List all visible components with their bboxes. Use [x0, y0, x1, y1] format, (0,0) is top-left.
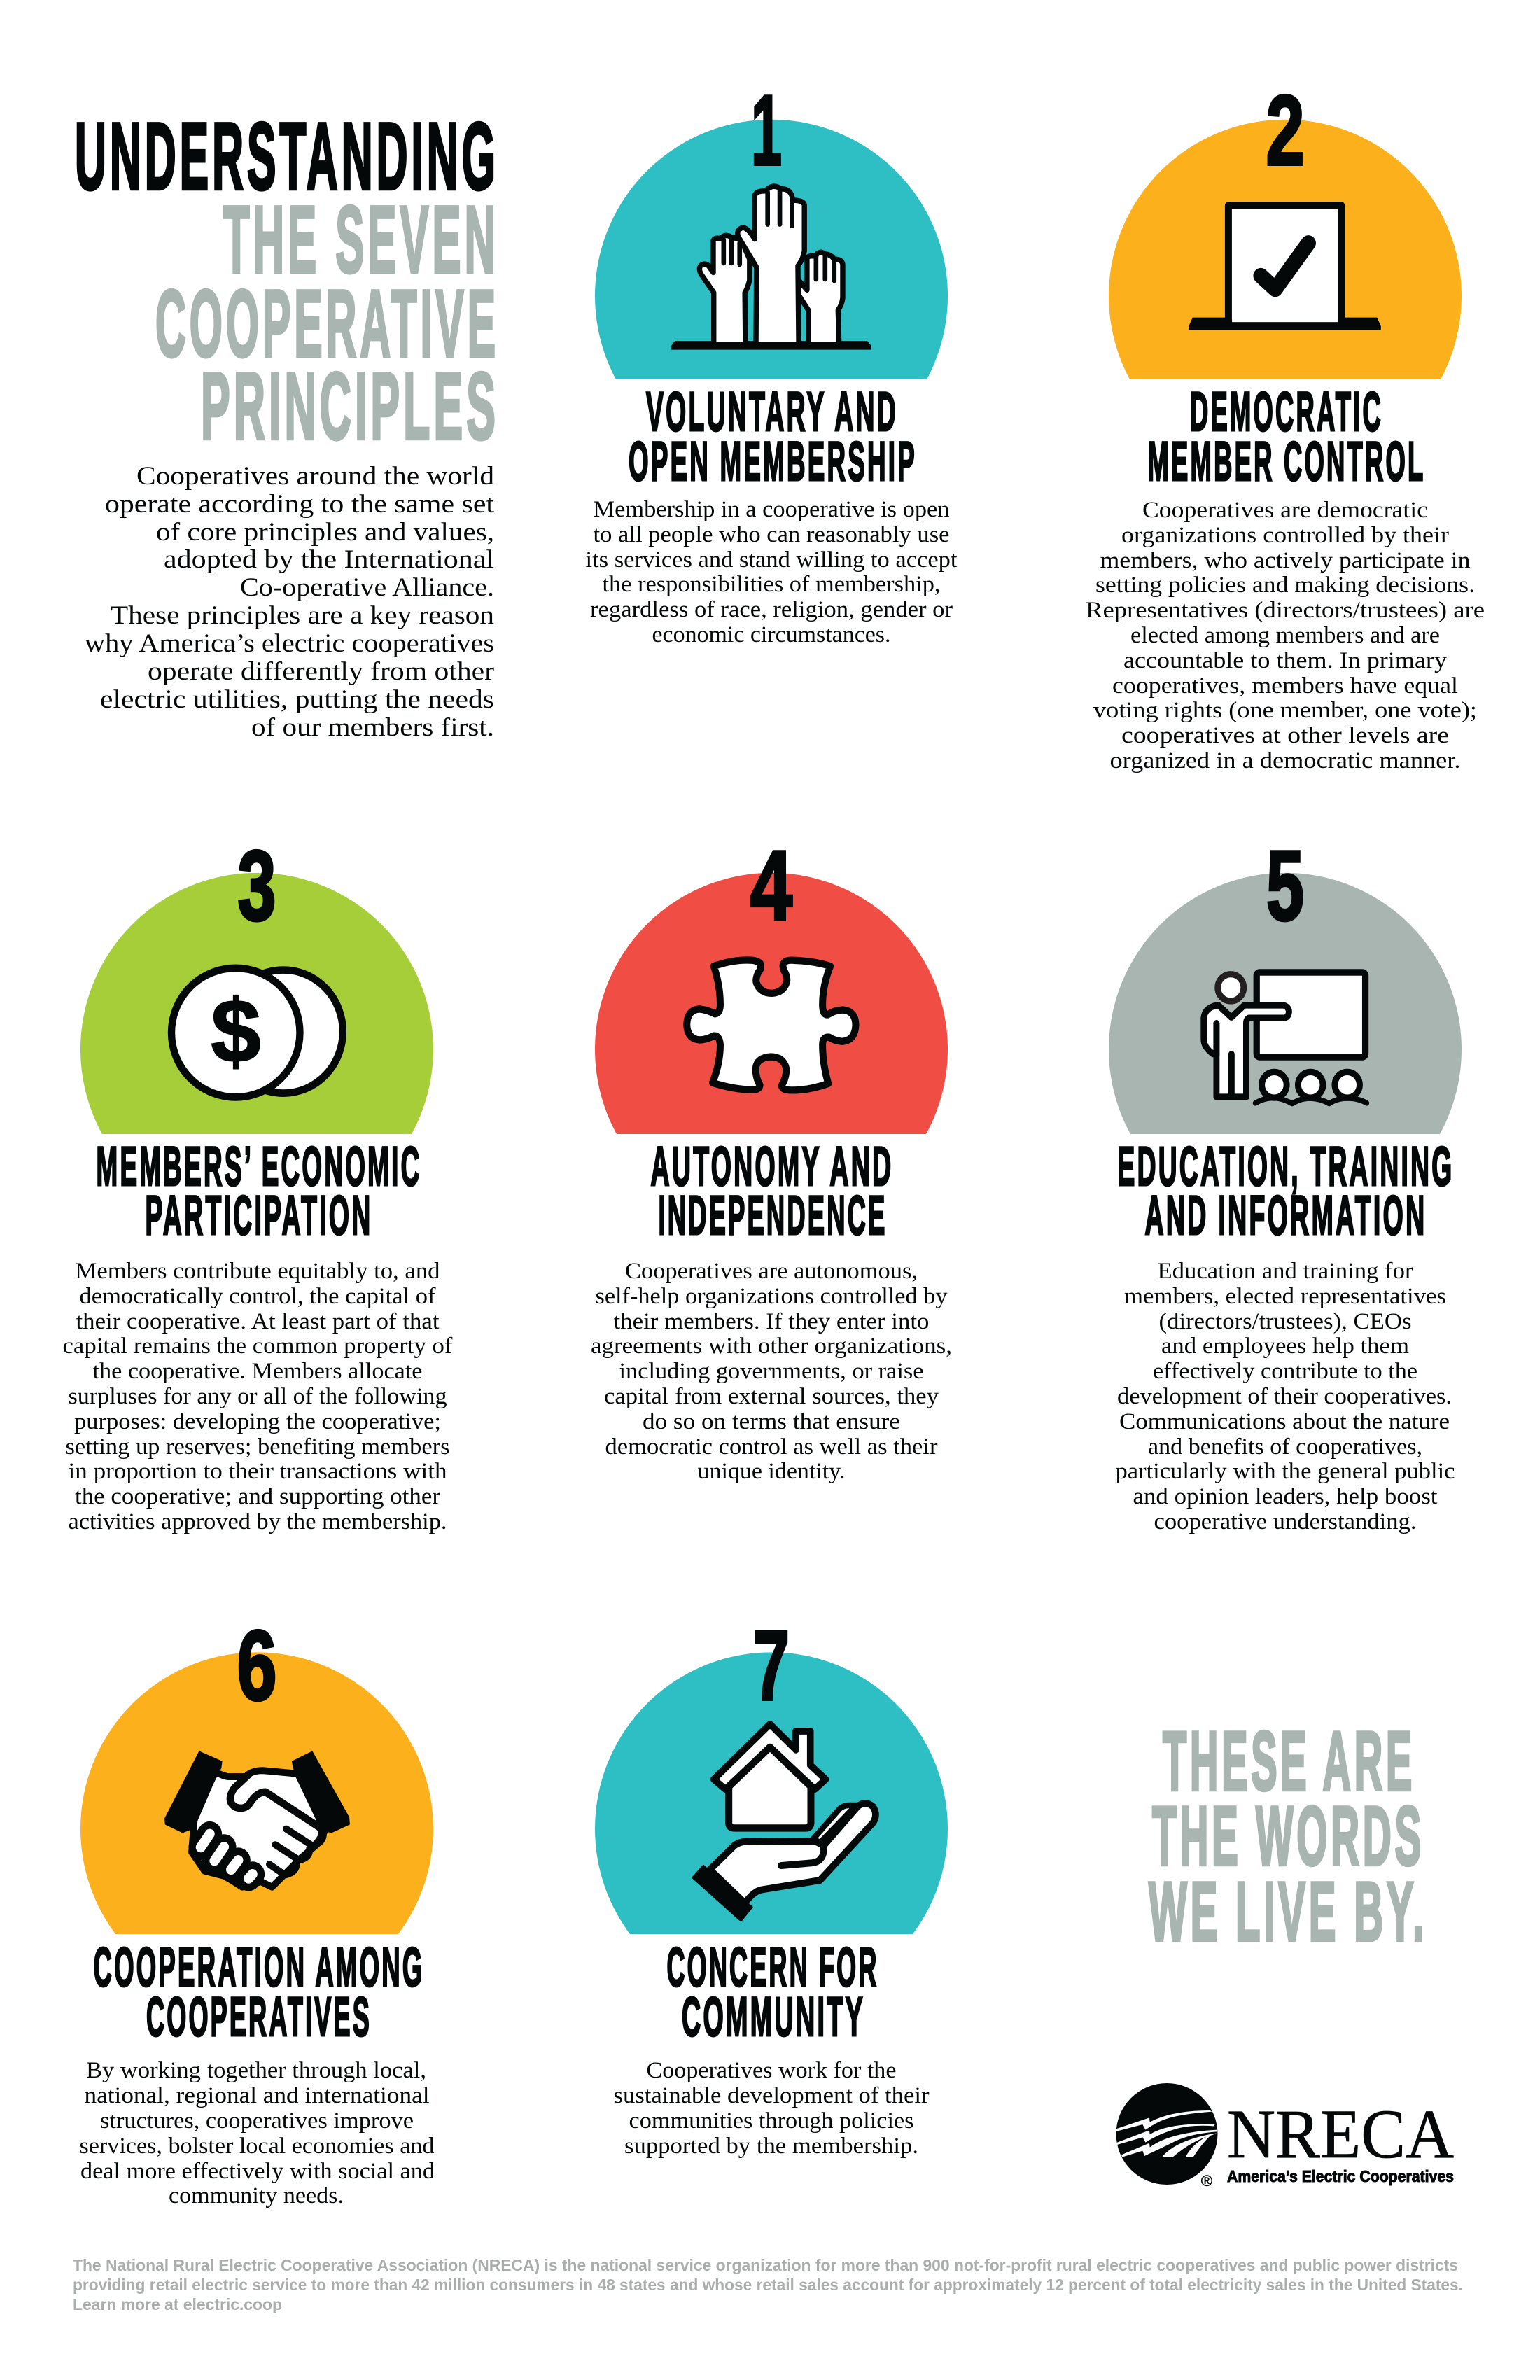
panel: principle 5 [1109, 830, 1462, 1534]
text: THE SEVEN [223, 186, 499, 293]
body text: setting up reserves; benefiting members [66, 1434, 449, 1460]
body text: their members. If they enter into [613, 1309, 930, 1334]
body text: the responsibilities of membership, [602, 572, 941, 597]
dome [595, 120, 948, 379]
logo: NRECA [1116, 2083, 1454, 2190]
body text: self-help organizations controlled by [595, 1284, 948, 1309]
icon: handshake [165, 1752, 349, 1887]
heading [97, 1135, 421, 1246]
body text [1086, 498, 1485, 774]
number 7: 7 [753, 1610, 790, 1721]
panel: principle 7: CONCERN FOR [666, 1935, 879, 1998]
icon: ballot box with check [1189, 205, 1381, 330]
intro text: electric utilities, putting the needs [100, 685, 494, 714]
intro text: Co-operative Alliance. [240, 573, 494, 602]
body text: and opinion leaders, help boost [1133, 1484, 1438, 1509]
text: PRINCIPLES [201, 353, 499, 459]
logo mark [1116, 2083, 1218, 2185]
icon: coins [172, 968, 343, 1097]
body text: Cooperatives are democratic [1142, 498, 1428, 523]
body text: communities through policies [629, 2108, 914, 2134]
body text: members, elected representatives [1124, 1284, 1446, 1309]
panel: principle 4: AUTONOMY AND [651, 1135, 893, 1197]
body text: Members contribute equitably to, and [76, 1259, 440, 1284]
body text: Education and training for [1158, 1259, 1413, 1284]
intro text: Cooperatives around the world [136, 462, 495, 491]
body text: voting rights (one member, one vote); [1093, 698, 1477, 723]
heading: PARTICIPATION [146, 1184, 372, 1246]
body text [613, 2058, 930, 2159]
body text: cooperatives at other levels are [1121, 723, 1449, 748]
body text: sustainable development of their [613, 2083, 930, 2108]
body text: unique identity. [697, 1459, 846, 1484]
body text: cooperative understanding. [1154, 1509, 1417, 1534]
body text: particularly with the general public [1116, 1459, 1455, 1484]
body text: capital remains the common property of [63, 1334, 453, 1359]
heading: COMMUNITY [682, 1985, 865, 2047]
heading [629, 380, 917, 492]
intro text: of core principles and values, [156, 518, 494, 547]
tagline [1149, 1714, 1427, 1959]
panel: principle 3 [63, 830, 453, 1534]
number 1: 1 [751, 75, 782, 186]
body text: effectively contribute to the [1153, 1359, 1418, 1384]
panel: principle 7 [595, 1610, 948, 2159]
wordmark: NRECA [1227, 2095, 1454, 2173]
body text: organized in a democratic manner. [1110, 748, 1460, 774]
body text: elected among members and are [1130, 623, 1440, 648]
body text: Cooperatives are autonomous, [625, 1259, 918, 1284]
dome [80, 873, 433, 1134]
body text: its services and stand willing to accept [585, 547, 958, 573]
number 5: 5 [1266, 830, 1304, 941]
body text [591, 1259, 952, 1484]
body text: activities approved by the membership. [69, 1509, 447, 1534]
registered mark: ® [1201, 2172, 1212, 2190]
intro text: These principles are a key reason [111, 601, 494, 630]
panel: principle 2 [1086, 75, 1485, 774]
body text: community needs. [169, 2183, 344, 2208]
body text: including governments, or raise [619, 1359, 924, 1384]
panel: principle 1 [585, 75, 958, 648]
body text: members, who actively participate in [1100, 548, 1470, 573]
dome [1109, 873, 1462, 1134]
body text: structures, cooperatives improve [100, 2108, 414, 2134]
body text: and benefits of cooperatives, [1148, 1434, 1422, 1460]
intro text: why America’s electric cooperatives [85, 629, 494, 658]
title [75, 103, 499, 459]
footer text [73, 2256, 1463, 2314]
text: COOPERATION AMONG [94, 1935, 424, 1998]
body text: cooperatives, members have equal [1112, 673, 1458, 699]
body text: agreements with other organizations, [591, 1334, 952, 1359]
number 2: 2 [1266, 75, 1305, 186]
heading [1117, 1135, 1455, 1246]
dollar sign: $ [211, 981, 261, 1082]
body text: services, bolster local economies and [80, 2134, 435, 2159]
body text: development of their cooperatives. [1117, 1384, 1452, 1409]
body text: regardless of race, religion, gender or [590, 597, 953, 622]
body text: setting policies and making decisions. [1096, 573, 1475, 598]
dome [595, 873, 948, 1134]
body text: do so on terms that ensure [643, 1409, 900, 1434]
dome [595, 1652, 948, 1934]
intro text [85, 462, 495, 742]
body text: their cooperative. At least part of that [76, 1309, 440, 1334]
body text: surpluses for any or all of the following [69, 1384, 447, 1409]
heading [651, 1135, 893, 1246]
panel: principle 1: OPEN MEMBERSHIP [629, 430, 917, 492]
body text: accountable to them. In primary [1124, 648, 1448, 673]
body text: the cooperative; and supporting other [75, 1484, 440, 1509]
body text: supported by the membership. [624, 2134, 918, 2159]
number 4: 4 [750, 830, 792, 941]
number 6: 6 [237, 1610, 277, 1721]
icon: raised hands [671, 186, 872, 350]
body text: national, regional and international [84, 2083, 430, 2108]
body text: Membership in a cooperative is open [594, 497, 949, 522]
body text [585, 497, 958, 648]
body text: By working together through local, [86, 2058, 426, 2083]
body text: purposes: developing the cooperative; [74, 1409, 441, 1434]
body text: in proportion to their transactions with [69, 1459, 447, 1484]
body text: to all people who can reasonably use [594, 522, 949, 547]
body text: the cooperative. Members allocate [92, 1359, 423, 1384]
body text [80, 2058, 435, 2208]
body text: organizations controlled by their [1121, 523, 1449, 548]
body text: Communications about the nature [1119, 1409, 1450, 1434]
heading [94, 1935, 424, 2047]
intro text: operate differently from other [148, 657, 494, 686]
footer text: The National Rural Electric Cooperative Association (NRECA) is the national service organization for more than 900 not-for-profit rural electric cooperatives and public power districts [73, 2256, 1458, 2274]
panel: principle 4: INDEPENDENCE [658, 1184, 888, 1246]
body text [63, 1259, 453, 1534]
panel: principle 3: MEMBERS’ ECONOMIC [97, 1135, 421, 1197]
body text: democratic control as well as their [605, 1434, 938, 1460]
panel: principle 4 [591, 830, 952, 1484]
footer text: Learn more at electric.coop [73, 2295, 282, 2314]
intro text: adopted by the International [164, 545, 494, 574]
icon: house in hand [692, 1724, 876, 1921]
number 3: 3 [238, 830, 276, 941]
icon: puzzle piece [687, 960, 855, 1090]
body text: Cooperatives work for the [647, 2058, 896, 2083]
body text: Representatives (directors/trustees) are [1086, 598, 1485, 623]
footer text: providing retail electric service to more than 42 million consumers in 48 states and whose retail sales account for approximately 12 percent of total electricity sales in the United States. [73, 2276, 1463, 2294]
body text: deal more effectively with social and [80, 2159, 435, 2184]
body text: (directors/trustees), CEOs [1159, 1309, 1411, 1334]
text: UNDERSTANDING [75, 103, 499, 209]
intro text: operate according to the same set [105, 490, 495, 519]
heading [1148, 380, 1425, 492]
text: COOPERATIVE [155, 270, 499, 377]
body text: and employees help them [1161, 1334, 1409, 1359]
body text: economic circumstances. [652, 622, 890, 648]
intro text: of our members first. [251, 713, 494, 742]
heading: COOPERATIVES [146, 1985, 372, 2047]
panel: principle 6 [80, 1610, 435, 2208]
heading [666, 1935, 879, 2047]
body text: capital from external sources, they [604, 1384, 939, 1409]
dome [1109, 120, 1462, 379]
body text: democratically control, the capital of [80, 1284, 436, 1309]
heading: VOLUNTARY AND [646, 380, 898, 442]
icon: teacher at board [1204, 972, 1366, 1104]
dome [80, 1652, 433, 1934]
logo tagline: America’s Electric Cooperatives [1227, 2167, 1454, 2185]
body text [1116, 1259, 1455, 1534]
